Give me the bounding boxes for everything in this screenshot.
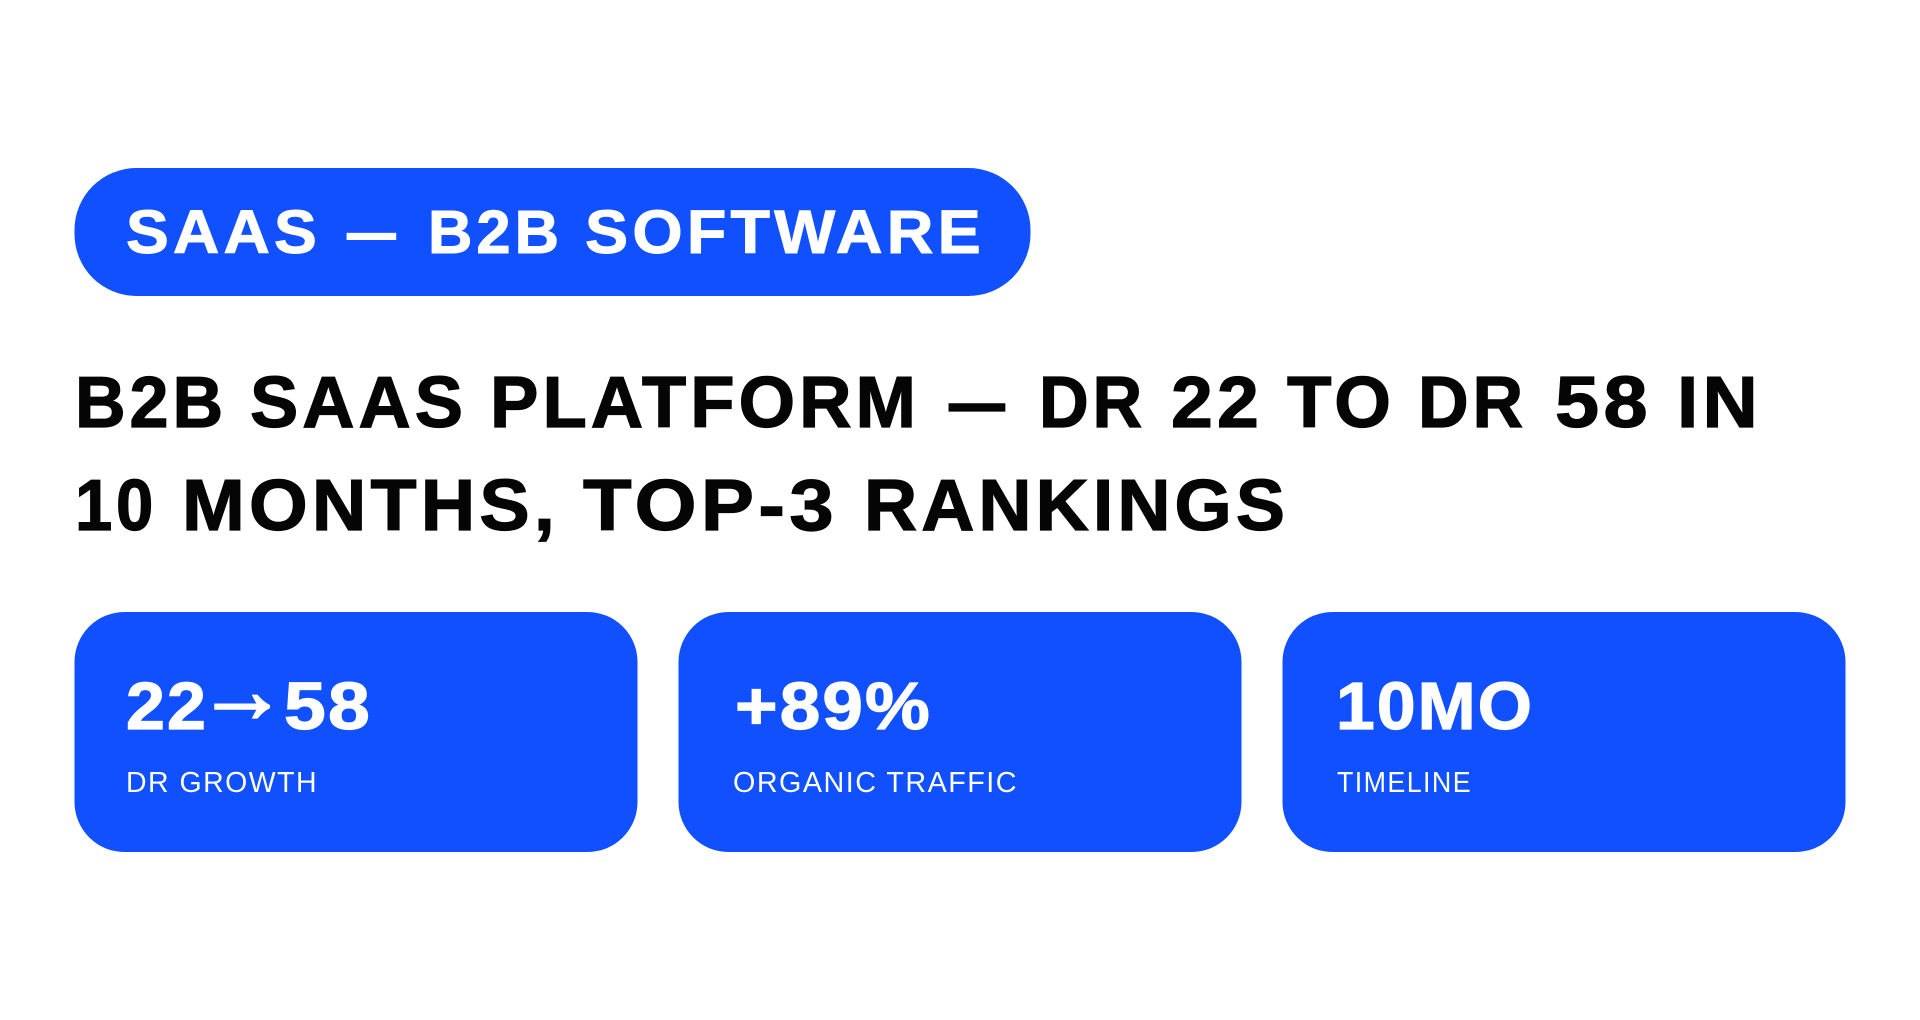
category pill (74, 168, 1030, 296)
title: MONTHS, (182, 466, 559, 546)
title: PLATFORM (490, 363, 920, 443)
stat card: organic traffic: +89% (735, 669, 932, 744)
stat card: organic traffic (678, 612, 1242, 852)
title: B2B (75, 363, 227, 443)
category pill: B2B (428, 198, 563, 266)
title: TOP-3 (583, 466, 838, 546)
stat card: timeline: 10MO (1336, 669, 1534, 744)
stat card: DR growth: DR GROWTH (126, 767, 318, 799)
title: 10 (75, 466, 157, 546)
stat card: DR growth: 58 (284, 669, 372, 744)
stat card: timeline (1282, 612, 1846, 852)
stat card: organic traffic: ORGANIC TRAFFIC (733, 767, 1018, 799)
title: — (949, 363, 1008, 443)
title: DR (1039, 363, 1146, 443)
title (75, 363, 1762, 546)
stat card: DR growth: 22 (126, 669, 208, 744)
stat card: DR growth: → (197, 640, 287, 742)
stat card: DR growth (74, 612, 638, 852)
title: DR (1418, 363, 1527, 443)
stat card: timeline: TIMELINE (1337, 767, 1472, 799)
category pill: SAAS (126, 198, 321, 266)
title: 22 (1171, 363, 1263, 443)
title: 58 (1555, 363, 1652, 443)
title: SAAS (250, 363, 467, 443)
title: TO (1287, 363, 1395, 443)
category pill: — (347, 198, 399, 266)
category pill: SOFTWARE (585, 198, 985, 266)
title: RANKINGS (864, 466, 1289, 546)
title: IN (1677, 363, 1762, 443)
